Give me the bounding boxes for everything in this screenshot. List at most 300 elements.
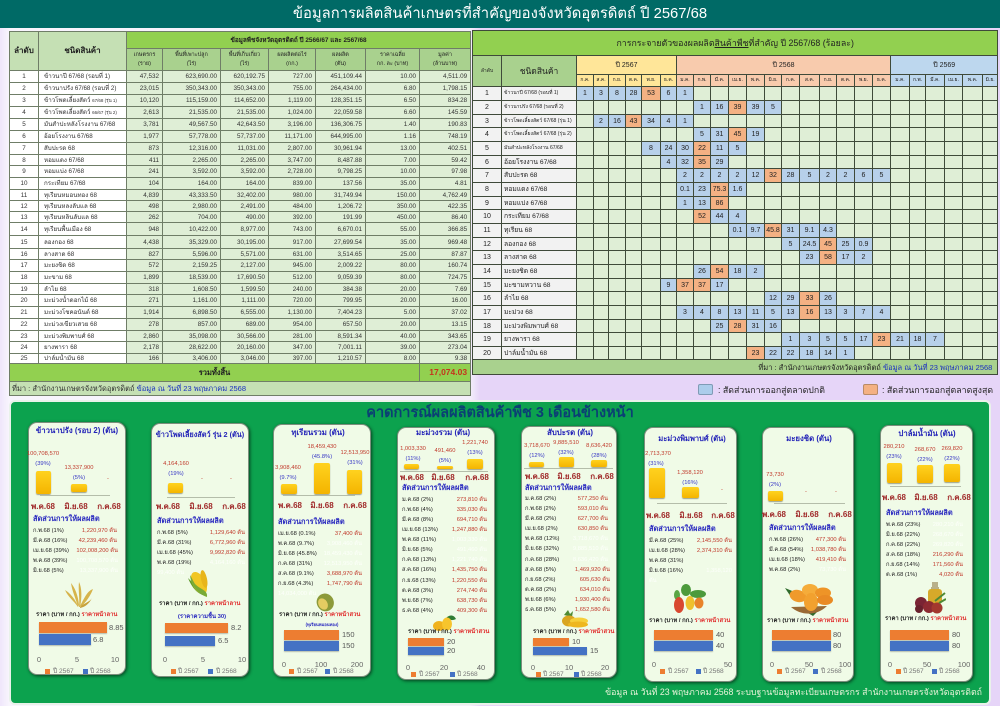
share of production: 73,730 ตัน [819,567,846,573]
bar chart: forecast output: (45.8%) [312,454,332,460]
share of production: 491,460 ตัน [457,547,487,553]
share of production: สัดส่วนการให้ผลผลิต [886,508,953,517]
table: harvest distribution by month: ก.ย. [824,77,832,83]
table: crop production data: 451,109.44 [330,73,362,80]
share of production: 1,220,550 ตัน [452,578,487,584]
table: harvest distribution by month: 23 [698,186,706,193]
table: harvest distribution by month: 4 [736,213,739,220]
share of production: 3,688,970 ตัน [327,571,362,577]
table: harvest distribution by month: มิ.ย. [768,77,778,83]
table: crop production data: 20.00 [400,321,416,328]
table: harvest distribution by month: 11 [483,227,491,234]
table: crop production data: 945.00 [293,262,312,269]
share of production: 14,034,000 ตัน [278,591,316,597]
table: harvest distribution by month: 1 [583,90,587,97]
table: harvest distribution by month: 30 [681,145,689,152]
table: crop production data: 21,535.00 [237,109,265,116]
table: harvest distribution by month: 7 [862,309,865,316]
table: crop production data: 18,539.00 [189,274,217,281]
table: harvest distribution by month: 11 [716,145,723,152]
table: crop production data: 86.40 [451,214,467,220]
table: crop production data: 631.00 [293,250,312,258]
table: harvest distribution by month: ส.ค. [596,77,606,83]
table: crop production data: หอมแบ่ง 67/68 [44,168,84,175]
month labels: พ.ค.68 [762,510,786,519]
table: crop production data: 572 [148,262,159,269]
table: crop production data: 5.00 [404,309,416,316]
bar chart: forecast output: - [835,489,837,495]
month labels: มิ.ย.68 [310,501,334,510]
table: harvest distribution by month: 32 [769,172,777,179]
table: harvest distribution by month: 9.1 [805,227,814,234]
table: harvest distribution by month: 5 [808,172,811,179]
price chart: 200 [351,660,363,669]
price chart: ราคา (บาท / กก.) ราคาหน้าสวน [279,612,360,618]
table: harvest distribution by month: 6 [485,158,489,166]
share of production: 1,129,640 ตัน [210,530,245,536]
share of production: สัดส่วนการให้ผลผลิต [769,523,836,532]
table: crop production data: 191.99 [343,214,362,220]
price chart: (ทุเรียนหมอนทอง) [306,622,338,627]
share of production: 280,210 ตัน [933,522,963,528]
price chart: 0 [282,660,286,669]
share of production: สัดส่วนการให้ผลผลิต [649,524,716,533]
price chart: ปี 2568 [90,668,111,675]
table: crop production data: (กก.) [286,60,298,66]
table: crop production data: 35,098.00 [189,332,217,340]
table: crop production data: 873 [148,145,159,152]
month labels: ก.ค.68 [343,501,367,510]
price chart: 8.85 [109,623,124,632]
bar chart: forecast output: (5%) [439,458,451,464]
share of production: สัดส่วนการให้ผลผลิต [525,483,592,492]
table: crop production data: 3,406.00 [192,355,217,362]
table: harvest distribution by month: 12 [752,172,759,179]
table: harvest distribution by month: 16 [716,104,723,111]
table: crop production data: ทุเรียนหมอนทอง 68 [44,192,97,198]
card: pimpaphat mango [644,427,737,682]
table: harvest distribution by month: 11 [752,309,759,316]
table: crop production data: 1,206.72 [337,202,362,210]
bar chart: forecast output: (31%) [648,461,664,467]
table: crop production data: 2,265.00 [240,156,265,164]
month labels: พ.ค.68 [882,493,906,502]
table: harvest distribution by month: 34 [647,118,655,124]
table: harvest distribution by month: 4 [700,309,704,316]
share of production: ม.ค.68 (2%) [525,496,556,502]
table: crop production data: 2,491.00 [240,202,265,210]
icon: mango and cashew fruit [674,584,706,613]
table: harvest distribution by month: 0.1 [680,186,690,193]
bar chart: forecast output [645,451,727,504]
share of production: 274,740 ตัน [457,588,487,594]
table: crop production data: กระเทียม 67/68 [44,180,86,187]
card title: ข้าวนาปรัง (รอบ 2) (ตัน) [36,426,118,435]
price chart [279,610,363,675]
share of production: มี.ค.68 (25%) [649,538,683,544]
table: crop production data: 2,860 [143,332,159,340]
table: crop production data: 799.95 [343,297,362,304]
price chart: 20 [447,637,455,646]
table: harvest distribution by month: ก.พ. [913,77,922,83]
table: crop production data: 104 [148,180,159,187]
table: crop production data: 1,119.00 [288,97,312,104]
table: crop production data: 512.00 [293,274,312,281]
share of production: มี.ค.68 (31%) [157,540,191,546]
share of production: 577,250 ตัน [578,496,608,502]
table: crop production data: 11,171.00 [284,133,312,140]
share of production [649,524,732,584]
table: harvest distribution by month: 37 [698,282,706,288]
price chart: ปี 2567 [785,668,806,675]
table: crop production data: 20.00 [400,286,416,292]
icon: durian [316,594,334,612]
table: harvest distribution by month: 9 [485,200,489,206]
table: harvest distribution by month: 44 [716,213,723,220]
table: crop production data: 318 [148,286,159,292]
table: crop production data: 241 [148,168,159,175]
month labels: พ.ค.68 [278,501,302,510]
price chart: 40 [716,630,724,639]
table: crop production data: 2,807.00 [287,145,312,152]
table: crop production data: 49,567.50 [189,121,217,128]
table: harvest distribution by month: ลางสาด 68 [504,254,537,261]
table: crop production data: 19 [20,286,28,292]
table: harvest distribution by month: 2 [844,172,847,179]
table: crop production data: 3,592.00 [240,168,265,175]
month labels: มิ.ย.68 [795,510,819,519]
table: crop production data: อ้อยโรงงาน 67/68 [44,133,93,140]
table: crop production data: 954.00 [293,321,312,328]
share of production: 216,290 ตัน [933,552,963,558]
bar chart: forecast output: 2,713,370 [645,451,671,457]
table: crop production data: 273.04 [448,344,467,351]
month labels [31,502,121,511]
table: crop production data: พื้นที่เก็บเกี่ยว [229,52,260,58]
bar chart: forecast output: 4,164,160 [163,461,189,467]
table: crop production data: พื้นที่เพาะปลูก [175,52,208,58]
table: harvest distribution by month: 15 [483,282,491,288]
table: crop production data: มันสำปะหลังโรงงาน 67/68 [44,121,115,128]
table: harvest distribution by month: 17 [716,282,723,288]
table: crop production data: 4,839 [143,192,159,198]
card title: มะม่วงพิมพาบศ์ (ตัน) [658,434,726,443]
forecast heading: คาดการณ์ผลผลิตสินค้าพืช 3 เดือนข้างหน้า [366,405,634,421]
price chart: ปี 2568 [333,668,354,675]
share of production: พ.ค.68 (39%) [33,558,67,564]
card title: ทุเรียนรวม (ตัน) [291,428,345,437]
table: harvest distribution by month: 2 [700,172,704,179]
price chart: ปี 2568 [581,671,602,678]
bar chart: forecast output: (5%) [73,475,85,481]
share of production [402,483,487,614]
table: harvest distribution by month: 7 [933,336,937,343]
table: crop production data: 7 [22,145,26,152]
table: harvest distribution by month: พ.ค. [751,77,760,83]
table: harvest distribution by month: ธ.ค. [664,77,673,83]
price chart: 100 [315,660,327,669]
table: crop production data: 37.02 [451,309,467,316]
table: harvest distribution by month: พ.ย. [646,77,656,83]
table: crop production data: 22 [20,321,28,328]
table: crop production data: 727.00 [293,73,312,80]
table: crop production data [9,31,471,396]
share of production: เม.ย.68 (45%) [157,550,193,556]
month labels: มิ.ย.68 [557,472,581,481]
bar chart: forecast output: (32%) [558,450,574,456]
table: crop production data: 2,127.00 [240,262,265,269]
table: harvest distribution by month: กระเทียม 67/68 [504,213,549,220]
table: crop production data: 1 [22,73,26,80]
table: harvest distribution by month: 3 [599,90,603,97]
table: crop production data: 30,195.00 [237,238,265,246]
table: harvest distribution by month: 31 [787,227,794,234]
table: harvest distribution by month: 7 [485,172,489,179]
table: crop production data: 114,652.00 [234,97,265,104]
table: crop production data: 2,159.25 [192,262,217,269]
table: crop production data: (ไร่) [240,60,249,66]
share of production: ก.ย.68 (2%) [525,577,555,583]
price chart: 0 [163,655,167,664]
table: harvest distribution by month: 13 [824,309,832,316]
table: harvest distribution by month: 22 [698,145,706,152]
price chart: (ราคาความชื้น 30) [178,614,226,620]
table: crop production data: 392.00 [293,214,312,220]
table: harvest distribution by month: ม.ค. [680,77,690,83]
bar chart: forecast output: 18,459,430 [307,444,337,450]
table: harvest distribution by month: 12 [483,240,491,248]
table: crop production data: มะขาม 68 [44,274,72,281]
share of production: ก.พ.68 (2%) [525,506,556,512]
price chart: 20 [440,663,448,672]
table: harvest distribution by month: 33 [806,295,813,302]
price chart: 20 [447,646,455,655]
table: harvest distribution by month: ปาล์มน้ำมัน 68 [504,350,547,356]
table: crop production data: 8,487.88 [337,156,362,164]
price chart: 6.8 [93,635,103,644]
share of production: ก.ย.68 (4.3%) [278,581,313,587]
table: harvest distribution by month: 4 [667,118,670,124]
table: harvest distribution by month: มะม่วงพิมพาบศ์ 68 [504,322,558,330]
table: harvest distribution by month: อ้อยโรงงาน 67/68 [504,158,557,166]
table: crop production data: มะยงชิด 68 [44,262,75,269]
share of production: 1,003,330 ตัน [452,537,487,543]
share of production: สัดส่วนการให้ผลผลิต [157,516,224,525]
table: harvest distribution by month: 16 [769,322,777,330]
table: crop production data: 3,514.65 [337,250,362,258]
price chart: ปี 2568 [457,671,478,678]
table: harvest distribution by month: 16 [613,118,621,124]
share of production: ก.ค.68 (22%) [886,542,920,548]
card title: ข้าวโพดเลี้ยงสัตว์ รุ่น 2 (ตัน) [156,430,244,439]
table: crop production data: ผลผลิตต่อไร่ [277,52,307,58]
bar chart: forecast output: - [805,489,807,495]
table: crop production data: 350.00 [397,202,416,210]
share of production [525,483,610,613]
table: crop production data: 3 [22,97,26,104]
table: crop production data: 128,351.15 [330,97,362,104]
share of production: ก.ค.68 (28%) [525,557,559,563]
table: harvest distribution by month: 20 [483,350,491,356]
table: harvest distribution by month: 3 [683,309,687,316]
share of production: ต.ค.68 (1%) [886,572,917,578]
table: harvest distribution by month: 13 [734,309,741,316]
table: harvest distribution by month: 16 [806,309,813,316]
table: crop production data: 4.81 [455,180,467,187]
table: crop production data: 1,599.50 [240,286,265,292]
table: harvest distribution by month: หอมแดง 67/68 [504,186,547,193]
table: harvest distribution by month: 6 [862,172,865,179]
table: harvest distribution by month: ก.ค. [786,77,795,83]
share of production: 37,400 ตัน [335,531,362,537]
price chart: 0 [531,663,535,672]
table: harvest distribution by month: 2 [826,172,830,179]
table: crop production data: 8.00 [404,355,416,362]
table: crop production data: ทุเรียนพื้นเมือง 68 [44,226,91,232]
table: harvest distribution by month: 5 [880,172,883,179]
table: crop production data: 11,031.00 [237,145,265,152]
table: harvest distribution by month: เม.ย. [948,77,959,83]
table: harvest distribution by month: 9 [667,282,670,288]
price chart [767,616,851,675]
table: crop production data: ทุเรียนหลงลับแล 68 [44,202,96,210]
share of production: ก.พ.68 (5%) [157,530,188,536]
share of production: 13,337,900 ตัน [80,568,118,574]
table: harvest distribution by month: 23 [806,254,813,261]
table: harvest distribution by month: 1 [683,90,687,97]
share of production: ส.ค.68 (16%) [402,567,436,573]
price chart: 80 [952,641,960,650]
table: crop production data: เกษตรกร [134,52,155,58]
table: crop production data: 689.00 [246,321,265,328]
table: harvest distribution by month: 2 [754,268,757,275]
table: crop production data: 7.00 [404,156,416,164]
table: harvest distribution by month: 17 [842,254,849,261]
table: crop production data: 80.00 [400,274,416,281]
month labels [525,472,614,481]
table: crop production data: 150.00 [397,192,416,198]
share of production: พ.ค.68 (9.7%) [278,541,314,547]
table: harvest distribution by month: 54 [716,268,723,275]
table: harvest distribution by month: ชนิดสินค้า [520,66,558,76]
price chart: 50 [805,660,813,669]
bar chart: forecast output [884,444,962,487]
table: harvest distribution by month: 2 [736,172,739,179]
table: crop production data: 17,074.03 [429,367,467,377]
share of production: 4,164,160 ตัน [210,560,245,566]
table: harvest distribution by month: 2 [683,172,687,179]
table: harvest distribution by month: 29 [716,158,723,166]
table: crop production data: 23,015 [140,85,159,92]
table: harvest distribution by month: 75.3 [713,186,726,193]
table: crop production data: มะม่วงโชคอนันต์ 68 [44,309,98,316]
table: harvest distribution by month: ยางพารา 68 [504,336,540,343]
table: harvest distribution by month: 86 [716,200,723,206]
bar chart: forecast output: 1,221,740 [462,440,488,446]
table: harvest distribution by month: 26 [698,268,706,275]
source note: ข้อมูล ณ วันที่ 23 พฤษภาคม 2568 ระบบฐานข้อมูลทะเบียนเกษตรกร สำนักงานเกษตรจังหวัดอุตรดิตถ์ [605,687,982,697]
table: harvest distribution by month: 32 [681,158,689,166]
table: harvest distribution by month: ข้าวโพดเลี้ยงสัตว์ 67/68 (รุ่น 1) [504,118,572,124]
bar chart: forecast output: (2%) [769,482,781,488]
share of production: 1,038,780 ตัน [811,547,846,553]
table: crop production data: 30,566.00 [237,332,265,340]
bar chart: forecast output [27,451,110,496]
bar chart: forecast output: (16%) [682,480,698,486]
table: crop production data: 115,159.00 [186,97,217,104]
table: harvest distribution by month: เม.ย. [732,77,743,83]
price chart: ราคา (บาท / กก.) ราคาหน้าลาน [36,612,117,618]
table: crop production data: 10,120 [140,97,159,104]
share of production: 268,670 ตัน [933,532,963,538]
share of production: 100,708,570 ตัน [76,558,118,564]
table: harvest distribution by month: 2 [599,118,603,124]
price chart [36,610,124,675]
bar chart: forecast output: 268,670 [915,447,935,453]
table: harvest distribution by month: 0.1 [733,227,742,234]
table: harvest distribution by month: ลำไย 68 [504,295,528,302]
table: crop production data: 25.00 [400,250,416,258]
month labels: พ.ค.68 [525,472,549,481]
table: harvest distribution by month: ที่มา : สำนักงานเกษตรจังหวัดอุตรดิตถ์ ข้อมูล ณ วันที่ 23 พฤษภาคม 2568 [758,362,992,372]
price chart: 10 [238,655,246,664]
share of production: พ.ค.68 (2%) [769,567,800,573]
table: harvest distribution by month: พ.ค. [968,77,977,83]
share of production: สัดส่วนการให้ผลผลิต [278,517,345,526]
table: crop production data: 857.00 [198,321,217,328]
table: harvest distribution by month: 2 [485,104,489,111]
icon: rice stalks [65,582,93,608]
table: harvest distribution by month: 1 [683,118,687,124]
share of production: มี.ค.68 (54%) [769,547,803,553]
table: crop production data: 6,670.01 [337,226,362,232]
table: crop production data: 22,059.58 [334,109,362,116]
month labels [762,510,852,519]
month labels [646,511,735,520]
share of production: ก.พ.68 (1%) [33,528,64,534]
table: crop production data: หอมแดง 67/68 [44,156,84,164]
table: crop production data: มูลค่า [438,52,452,58]
table: harvest distribution by month: 8 [718,309,721,316]
table: crop production data: 35,329.00 [189,238,217,246]
share of production: 1,652,580 ตัน [575,607,610,613]
table: harvest distribution by month: การกระจายตัวของผลผลิตสินค้าพืชที่สำคัญ ปี 2567/68 (ร้อยละ) [616,38,854,48]
table: harvest distribution by month: มะม่วง 68 [504,309,533,316]
price chart: 80 [833,641,841,650]
table: crop production data: 145.59 [448,109,467,116]
table: crop production data: ข้อมูลพืชจังหวัดอุตรดิตถ์ ปี 2566/67 และ 2567/68 [230,36,367,44]
table: crop production data: (ล้านบาท) [433,60,457,66]
table: harvest distribution by month: 8 [485,186,489,193]
table: crop production data: 16.00 [451,297,467,304]
table: harvest distribution by month: ธ.ค. [877,77,886,83]
table: crop production data: 1,608.50 [192,286,217,292]
table: crop production data: 748.19 [448,133,467,140]
table: crop production data: 13 [20,214,28,220]
card title: สับปะรด (ตัน) [547,428,593,437]
month labels: ก.ค.68 [947,493,971,502]
table: crop production data: 366.85 [448,226,467,232]
table: harvest distribution by month: ส.ค. [805,77,814,83]
table: crop production data: 1,798.15 [443,85,467,92]
price chart: 10 [565,663,573,672]
table: harvest distribution by month: ข้าวนาปี 67/68 (รอบที่ 1) [504,90,558,96]
table: crop production data: 724.75 [448,274,467,281]
share of production: ก.ย.68 (14%) [886,562,920,568]
table: harvest distribution by month: ม.ค. [895,77,905,83]
table: harvest distribution by month: 29 [787,295,794,302]
share of production: 638,730 ตัน [457,598,487,604]
